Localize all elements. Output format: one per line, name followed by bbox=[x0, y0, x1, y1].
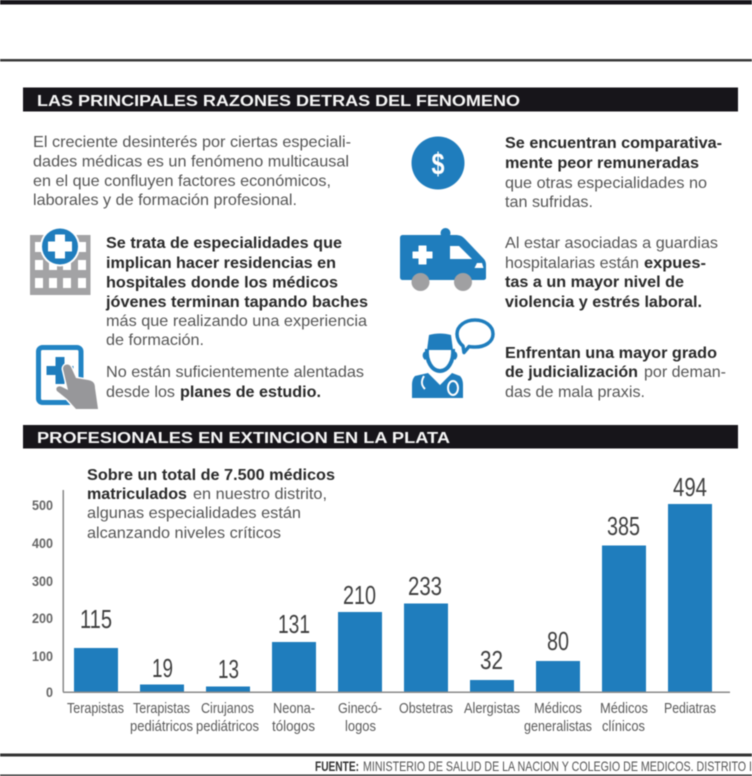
bar: Médicos clínicos bbox=[600, 511, 648, 735]
text block: violencia: Al estar asociadas a guardias bbox=[505, 235, 718, 252]
text block: violencia: expues- bbox=[644, 255, 706, 272]
bar: Médicos clínicos: clínicos bbox=[602, 718, 645, 735]
text block: residencias: de formación. bbox=[106, 332, 204, 349]
text block: residencias bbox=[105, 235, 368, 349]
bar: Cirujanos pediátricos: pediátricos bbox=[196, 718, 259, 735]
text block: residencias: más que realizando una experiencia bbox=[106, 313, 367, 330]
bar: Pediatras: Pediatras bbox=[664, 700, 716, 717]
bar: Neonatólogos bbox=[272, 609, 316, 735]
text block: planes de estudio bbox=[106, 364, 364, 401]
text block: judicialización bbox=[505, 345, 726, 401]
text block: remuneración: Se encuentran comparativa- bbox=[505, 135, 722, 152]
bar: Ginecólogos: logos bbox=[345, 718, 376, 735]
bar chart bbox=[32, 472, 730, 735]
bar: Alergistas: Alergistas bbox=[464, 700, 520, 717]
icon: moneda: $ bbox=[432, 146, 444, 181]
text block: descripción del gráfico: alcanzando niveles críticos bbox=[87, 525, 281, 542]
bar: Ginecólogos: 210 bbox=[343, 580, 376, 610]
bar: Neonatólogos: Neona- bbox=[273, 700, 315, 717]
y axis bbox=[32, 490, 64, 700]
source note: FUENTE: bbox=[315, 758, 359, 774]
bar: Pediatras: 494 bbox=[673, 472, 707, 502]
bar: Ginecólogos bbox=[338, 580, 382, 735]
text block: introducción: laborales y de formación profesional. bbox=[33, 192, 297, 209]
text block: descripción del gráfico: algunas especialidades están bbox=[87, 505, 301, 522]
text block: residencias: Se trata de especialidades que bbox=[106, 235, 342, 252]
text block: introducción bbox=[33, 134, 351, 209]
text block: planes de estudio: planes de estudio. bbox=[180, 384, 321, 401]
text block: planes de estudio: No están suficientemente alentadas bbox=[106, 364, 364, 381]
text block: descripción del gráfico: en nuestro distrito, bbox=[193, 486, 327, 503]
bar: Neonatólogos: 131 bbox=[278, 609, 310, 639]
bar: Pediatras bbox=[664, 472, 716, 717]
text block: residencias: jóvenes terminan tapando baches bbox=[105, 294, 368, 311]
bar: Cirujanos pediátricos: Cirujanos bbox=[201, 700, 254, 717]
text block: planes de estudio: desde los bbox=[106, 384, 175, 401]
text block: judicialización: de judicialización bbox=[505, 364, 638, 381]
bar: Neonatólogos: tólogos bbox=[272, 718, 315, 735]
heading: profesionales: PROFESIONALES EN EXTINCION EN LA PLATA bbox=[37, 430, 451, 447]
bar: Terapistas bbox=[67, 604, 124, 717]
text block: descripción del gráfico: matriculados bbox=[87, 486, 187, 503]
icon: hospital bbox=[30, 226, 90, 295]
y axis: 400 bbox=[32, 535, 53, 551]
text block: residencias: implican hacer residencias en bbox=[106, 255, 336, 272]
y axis: 0 bbox=[46, 684, 53, 700]
bar: Obstetras bbox=[399, 571, 453, 717]
icon: ambulancia bbox=[400, 228, 486, 291]
bar: Médicos generalistas: generalistas bbox=[524, 718, 592, 735]
bar: Médicos clínicos: Médicos bbox=[600, 700, 648, 717]
bar: Terapistas: Terapistas bbox=[67, 700, 124, 717]
heading: razones bbox=[23, 88, 738, 112]
text block: remuneración: que otras especialidades no bbox=[505, 175, 707, 192]
bar: Médicos generalistas bbox=[524, 626, 592, 735]
text block: descripción del gráfico: Sobre un total de 7.500 médicos bbox=[87, 467, 335, 484]
bar: Terapistas pediátricos: pediátricos bbox=[130, 718, 193, 735]
bar: Terapistas: 115 bbox=[80, 604, 112, 634]
heading: razones: LAS PRINCIPALES RAZONES DETRAS DEL FENOMENO bbox=[37, 93, 520, 110]
bar: Obstetras: 233 bbox=[408, 571, 442, 601]
text block: remuneración: tan sufridas. bbox=[505, 194, 593, 211]
text block: judicialización: Enfrentan una mayor grado bbox=[505, 345, 717, 362]
text block: violencia: violencia y estrés laboral. bbox=[505, 294, 702, 311]
text block: introducción: en el que confluyen factores económicos, bbox=[33, 173, 331, 190]
bar: Cirujanos pediátricos bbox=[196, 654, 259, 735]
text block: violencia: tas a un mayor nivel de bbox=[505, 274, 684, 291]
y axis: 100 bbox=[32, 648, 53, 664]
bar: Médicos clínicos: 385 bbox=[607, 511, 640, 541]
y axis: 500 bbox=[32, 497, 53, 513]
heading: profesionales bbox=[23, 425, 738, 448]
bar: Terapistas pediátricos: 19 bbox=[152, 653, 173, 683]
y axis: 300 bbox=[32, 573, 53, 589]
text block: judicialización: das de mala praxis. bbox=[505, 384, 645, 401]
text block: introducción: El creciente desinterés por ciertas especiali- bbox=[33, 134, 351, 151]
text block: violencia: hospitalarias están bbox=[505, 255, 639, 272]
bar: Alergistas bbox=[464, 645, 520, 717]
icon: médico con globo de diálogo bbox=[412, 320, 493, 398]
text block: introducción: dades médicas es un fenómeno multicausal bbox=[33, 154, 349, 170]
bar: Terapistas pediátricos bbox=[130, 653, 193, 735]
text block: remuneración bbox=[505, 135, 722, 211]
text block: violencia bbox=[505, 235, 718, 311]
bar: Cirujanos pediátricos: 13 bbox=[218, 654, 239, 684]
icon: tablet con mano bbox=[38, 348, 98, 409]
icon: moneda bbox=[412, 136, 464, 190]
bar: Terapistas pediátricos: Terapistas bbox=[133, 700, 190, 717]
text block: residencias: hospitales donde los médicos bbox=[106, 274, 338, 292]
text block: descripción del gráfico bbox=[87, 467, 335, 542]
bar: Médicos generalistas: Médicos bbox=[534, 700, 582, 717]
y axis: 200 bbox=[32, 610, 53, 626]
text block: remuneración: mente peor remuneradas bbox=[505, 155, 699, 172]
bar: Médicos generalistas: 80 bbox=[547, 626, 569, 656]
bar: Alergistas: 32 bbox=[480, 645, 503, 675]
text block: judicialización: por deman- bbox=[644, 364, 726, 381]
bar: Ginecólogos: Ginecó- bbox=[338, 700, 382, 717]
bar: Obstetras: Obstetras bbox=[399, 700, 453, 717]
